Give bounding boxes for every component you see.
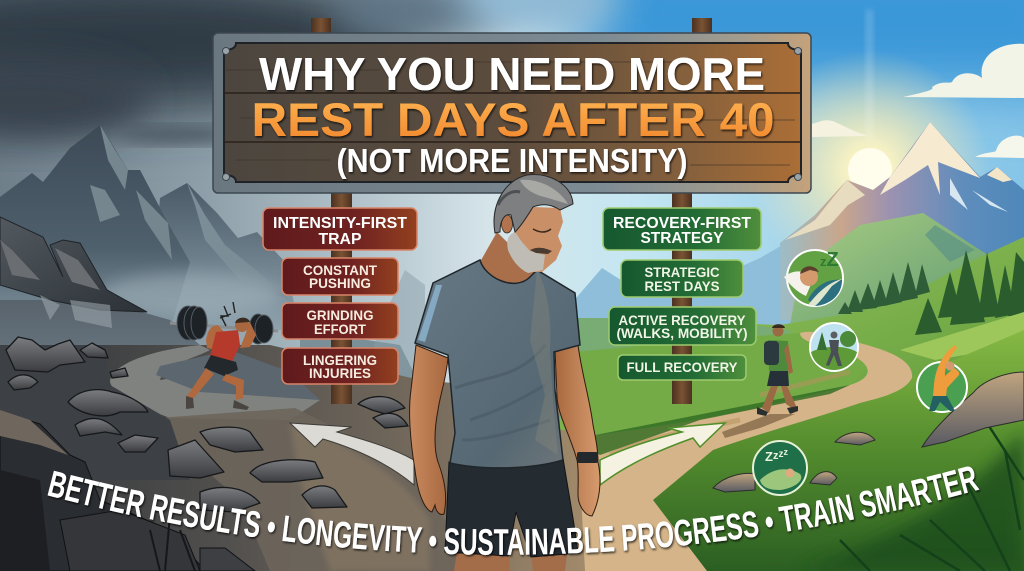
heading: intensity-first trap: INTENSITY-FIRST — [273, 215, 407, 232]
legs — [454, 545, 568, 571]
icon: sleep in bed — [784, 249, 843, 306]
right arm — [555, 345, 600, 516]
arrow: right toward recovery — [600, 423, 725, 485]
hair — [494, 175, 573, 233]
right sunny mountains — [570, 122, 1024, 340]
heading: intensity-first trap: TRAP — [318, 231, 362, 248]
item: active recovery: (WALKS, MOBILITY) — [616, 325, 748, 341]
right dirt trail — [578, 332, 1024, 571]
sleep letters: z — [773, 450, 779, 462]
sleep letters: z — [778, 449, 783, 460]
icon: side stretch — [917, 345, 967, 412]
scattered rocks on the left path — [6, 337, 408, 512]
item: lingering injuries: INJURIES — [309, 365, 371, 381]
title line 1: WHY YOU NEED MORE — [259, 48, 765, 100]
ground and rocky left path — [0, 345, 1024, 571]
cloud: behind sign right — [812, 120, 868, 137]
heading: recovery-first strategy: STRATEGY — [640, 230, 724, 247]
item: strategic rest days: STRATEGIC — [644, 264, 720, 280]
cloud: mid right — [975, 136, 1024, 158]
icon: hiker on the trail — [722, 324, 798, 438]
left arm — [410, 345, 448, 515]
heading: intensity-first trap — [263, 208, 417, 250]
title sign board — [213, 33, 811, 193]
icon: weightlifter under strain — [170, 302, 278, 410]
sleep letters: z — [783, 447, 788, 457]
shorts — [445, 458, 578, 557]
arrow: left toward trap — [290, 423, 414, 485]
icon: deep recovery sleep — [753, 441, 807, 495]
item: grinding effort: EFFORT — [314, 321, 366, 337]
item: grinding effort — [282, 303, 398, 339]
item: constant pushing: PUSHING — [309, 275, 371, 291]
green hills and trees — [560, 237, 1024, 440]
title line 2: REST DAYS AFTER 40 — [252, 93, 774, 146]
item: lingering injuries — [282, 348, 398, 384]
panel: recovery-first strategy — [603, 208, 761, 380]
item: strategic rest days: REST DAYS — [644, 278, 720, 294]
neck — [480, 232, 537, 287]
watch — [577, 452, 598, 463]
main figure: middle-aged man — [410, 175, 600, 571]
sleep letters: Z — [765, 449, 773, 464]
dark foreground boulders on the left — [0, 410, 255, 571]
item: lingering injuries: LINGERING — [303, 352, 377, 368]
left storm mountains — [0, 125, 570, 395]
heading: recovery-first strategy — [603, 208, 761, 250]
item: constant pushing — [282, 258, 398, 295]
heading: recovery-first strategy: RECOVERY-FIRST — [613, 215, 751, 232]
item: strategic rest days — [621, 260, 743, 297]
tagline on curved banner: BETTER RESULTS • LONGEVITY • SUSTAINABLE PROGRESS • TRAIN SMARTER — [48, 466, 981, 558]
item: active recovery — [609, 307, 756, 345]
cloud: upper right — [903, 44, 1024, 98]
item: full recovery — [618, 355, 746, 380]
left rocky ridge and foreground slope — [0, 217, 200, 400]
item: constant pushing: CONSTANT — [303, 262, 377, 278]
title line 3: (NOT MORE INTENSITY) — [336, 142, 688, 179]
t-shirt — [415, 260, 580, 468]
icon: walking in park — [810, 323, 858, 371]
face — [502, 207, 563, 273]
item: active recovery: ACTIVE RECOVERY — [618, 312, 746, 328]
item: grinding effort: GRINDING — [306, 307, 374, 323]
foreground grass on the right — [585, 330, 1024, 571]
item: full recovery: FULL RECOVERY — [626, 359, 738, 375]
sign posts — [311, 18, 712, 404]
panel: intensity-first trap — [263, 208, 417, 384]
sleep letters: zZ — [820, 249, 839, 271]
